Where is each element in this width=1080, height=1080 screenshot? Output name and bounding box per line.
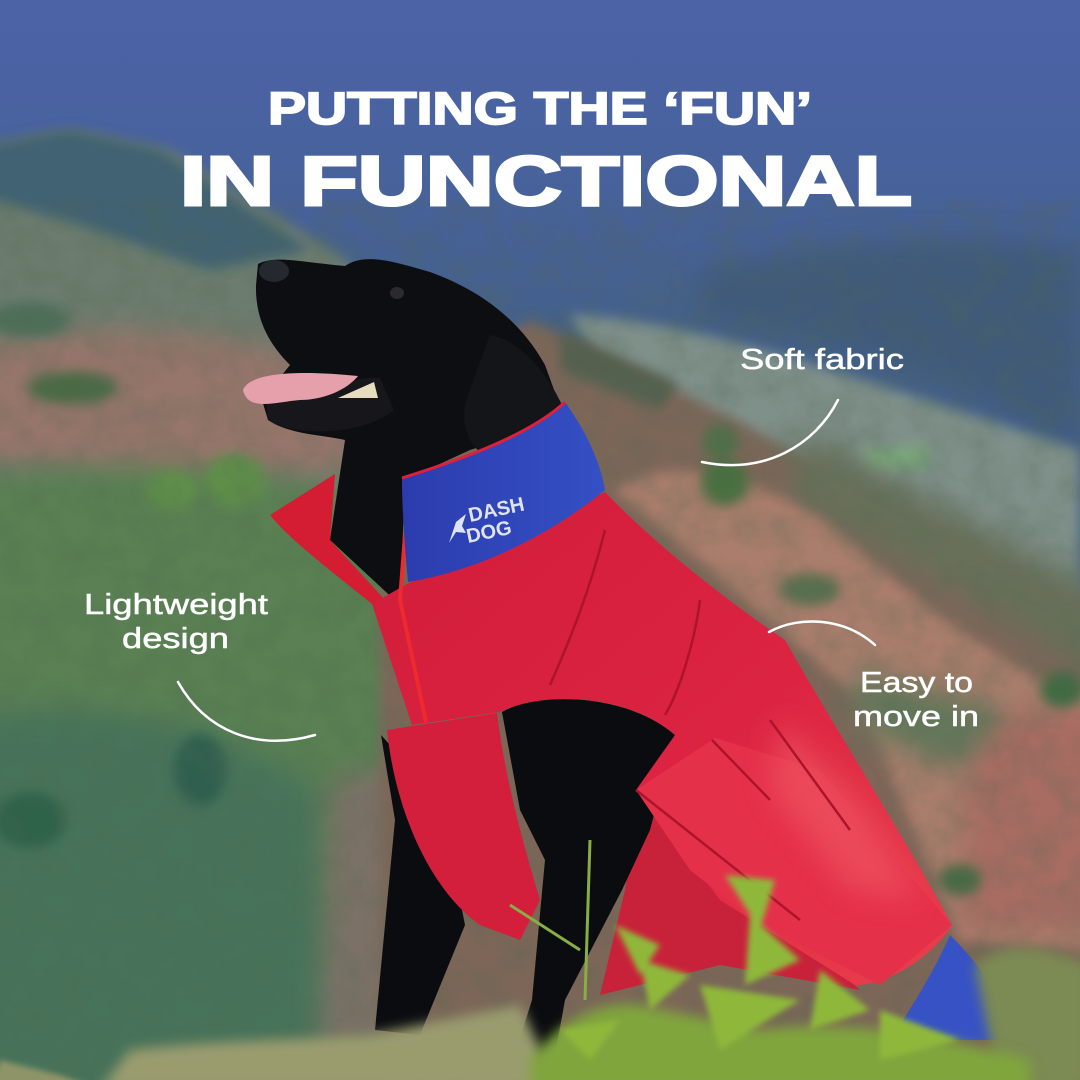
- right slope pink rock: [615, 471, 1080, 950]
- arrow: easy to move in: [769, 621, 875, 645]
- left hill top dark band: [0, 130, 310, 270]
- arrow: soft fabric: [702, 400, 838, 465]
- jacket: zipper: [400, 535, 426, 722]
- callout: easy to move in: move in: [853, 701, 979, 733]
- jacket: rear panel: [636, 738, 952, 985]
- distant valley terraces: [570, 315, 1080, 620]
- jacket: red front flap: [270, 474, 385, 604]
- arrow: lightweight design: [178, 682, 315, 741]
- callout: soft fabric: Soft fabric: [740, 344, 904, 376]
- dog: eye: [390, 287, 404, 299]
- dog: front leg: [375, 735, 465, 1035]
- dog: ear: [464, 335, 565, 452]
- photo: dog wearing jacket: [243, 259, 1015, 1076]
- jacket: dashdog logo: DOG: [464, 517, 514, 548]
- foliage patches: [560, 330, 680, 410]
- dog: nose: [259, 260, 289, 282]
- right slope base: [380, 320, 1080, 1080]
- dog: open mouth: [266, 378, 394, 431]
- callout: soft fabric: [702, 344, 904, 465]
- dog: rear leg: [502, 699, 675, 1076]
- title line 1: PUTTING THE ‘FUN’: [268, 83, 812, 134]
- left hill green slope: [0, 465, 400, 1080]
- jacket: belly panel: [387, 713, 540, 940]
- dog: head and neck: [256, 259, 565, 605]
- jacket: seam lines: [550, 530, 850, 920]
- jacket: highlight: [770, 720, 920, 900]
- dog: tongue: [243, 373, 358, 404]
- callout: lightweight design: [84, 589, 315, 741]
- title: [180, 83, 912, 220]
- callout: lightweight design: Lightweight: [84, 589, 268, 621]
- jacket: dashdog logo: DASH: [466, 494, 526, 527]
- left hill base: [0, 130, 420, 1080]
- callout: easy to move in: Easy to: [860, 667, 973, 699]
- dog: teeth: [338, 382, 378, 398]
- callout: lightweight design: design: [122, 623, 229, 655]
- left hill red band: [0, 329, 360, 490]
- title line 2: IN FUNCTIONAL: [180, 142, 912, 220]
- callout: easy to move in: [769, 621, 979, 733]
- distant ridge shadow: [700, 240, 1080, 450]
- jacket: blue tail trim: [890, 935, 1015, 1040]
- jacket: dashdog logo: [449, 494, 526, 548]
- jacket: red body: [372, 492, 952, 985]
- jacket: blue collar: [402, 402, 605, 582]
- grass foreground: [0, 840, 1080, 1080]
- jacket: lower body under: [600, 790, 860, 995]
